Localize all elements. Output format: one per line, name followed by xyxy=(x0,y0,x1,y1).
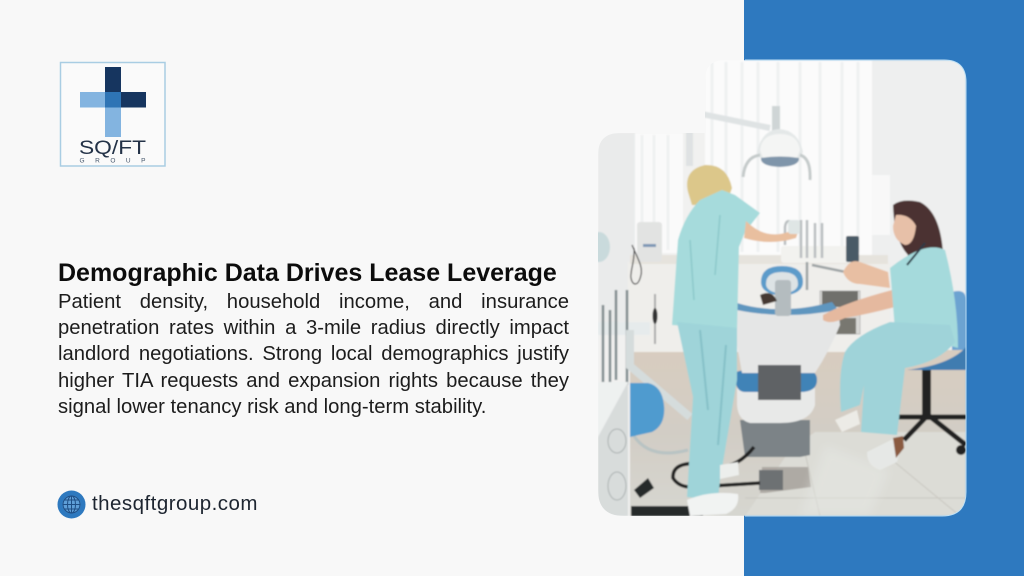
left cabinet with hoses xyxy=(588,232,703,516)
body text xyxy=(58,291,569,418)
photo: dental clinic xyxy=(598,60,966,516)
assistant seated xyxy=(823,201,966,470)
floor reflection xyxy=(807,482,876,516)
cabinets and counter xyxy=(628,222,890,352)
dental chair xyxy=(673,266,840,493)
icon: globe xyxy=(58,490,86,518)
dentist standing xyxy=(672,165,800,516)
stool xyxy=(896,291,966,455)
dental instruments unit xyxy=(781,219,849,291)
website url: thesqftgroup.com xyxy=(92,492,258,515)
floor xyxy=(630,350,966,516)
heading: Demographic Data Drives Lease Leverage xyxy=(58,259,557,287)
logo: SQ/FT Group: SQ/FT xyxy=(79,137,146,159)
body text: Patient density, household income, and insurance xyxy=(58,291,569,313)
logo: SQ/FT Group: GROUP xyxy=(80,158,146,164)
body text: landlord negotiations. Strong local demographics justify xyxy=(58,343,569,365)
body text: higher TIA requests and expansion rights because they xyxy=(58,370,569,392)
photo background: walls and window xyxy=(598,60,966,436)
photo light edge xyxy=(745,60,966,516)
dental lamp xyxy=(686,106,810,180)
panel: blue background xyxy=(744,0,1024,576)
body text: penetration rates within a 3-mile radius directly impact xyxy=(58,317,569,339)
logo: SQ/FT Group xyxy=(60,62,166,167)
body text: signal lower tenancy risk and long-term stability. xyxy=(58,396,486,418)
